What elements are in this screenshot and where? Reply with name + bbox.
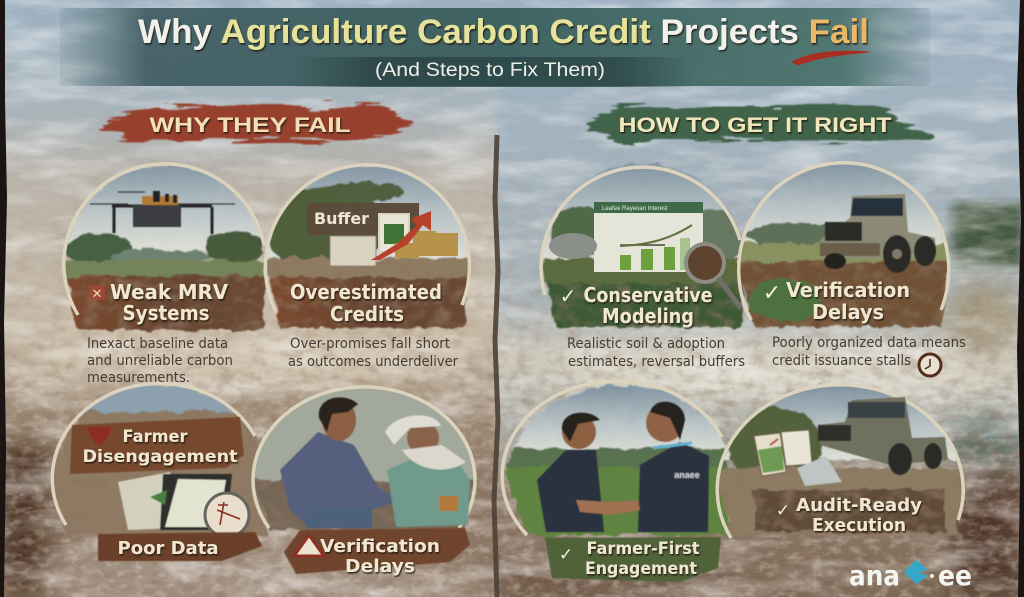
description: as outcomes underdeliver — [288, 354, 458, 370]
label: Weak MRV — [110, 280, 229, 304]
subtitle dark brush stroke — [290, 57, 695, 87]
check mark: ✓ — [763, 281, 781, 306]
icon: red shield — [87, 427, 112, 446]
heading: why they fail: WHY THEY FAIL — [150, 114, 351, 137]
two people shaking hands — [537, 402, 709, 532]
icon: warning triangle — [294, 535, 324, 556]
label: Farmer — [122, 427, 188, 447]
label: Execution — [812, 516, 906, 536]
check mark: ✓ — [776, 501, 790, 521]
check mark: ✓ — [560, 284, 576, 308]
panel: overestimated credits — [263, 160, 475, 370]
soil samples — [549, 233, 597, 259]
check mark: ✓ — [559, 545, 573, 565]
checklist documents — [754, 430, 842, 486]
icon: red up arrow — [371, 211, 431, 260]
truck — [818, 397, 948, 475]
icon: x mark: ✕ — [92, 287, 102, 302]
panel: audit-ready execution — [715, 385, 965, 538]
chart board: Leafee Rayeoan Interest — [602, 206, 668, 212]
panel: farmer disengagement / poor data — [50, 383, 270, 561]
description: measurements. — [87, 370, 190, 386]
brown label board — [98, 532, 262, 561]
label: Audit-Ready — [796, 496, 923, 516]
icon: coin stacks — [395, 231, 458, 258]
description: Poorly organized data means — [772, 335, 966, 351]
heading: how to get it right — [585, 106, 935, 141]
label: Engagement — [585, 559, 697, 578]
label: Delays — [345, 557, 415, 577]
description: credit issuance stalls — [772, 353, 911, 369]
green label board — [545, 537, 721, 582]
subtitle: (And Steps to Fix Them) — [375, 60, 605, 81]
label: Disengagement — [82, 447, 238, 467]
label: Farmer-First — [586, 539, 700, 558]
label: Poor Data — [118, 538, 218, 559]
description: estimates, reversal buffers — [568, 354, 745, 370]
icon: magnifying glass — [686, 244, 741, 308]
description: Inexact baseline data — [87, 336, 228, 352]
logo: anaxee: ana — [849, 559, 900, 592]
description: Realistic soil & adoption — [567, 336, 725, 352]
buffer word: Buffer — [314, 209, 369, 228]
brown label board — [70, 417, 244, 474]
logo dot — [930, 574, 934, 578]
panel: weak MRV systems — [60, 160, 270, 386]
red underline stroke — [792, 51, 869, 65]
truck — [820, 194, 936, 273]
panel: verification delays (right) — [738, 160, 966, 376]
logo: anaxee: ee — [938, 559, 972, 592]
panel: conservative modeling — [540, 160, 748, 370]
buffer sign — [307, 203, 419, 235]
chart board — [594, 202, 703, 272]
label: Modeling — [602, 304, 694, 328]
icon: clock — [205, 493, 249, 537]
label: Verification — [320, 537, 440, 557]
two people shaking hands: anaee — [674, 470, 700, 480]
label: Delays — [812, 300, 884, 324]
label: Conservative — [584, 283, 712, 307]
title banner — [60, 8, 930, 87]
icon: x mark — [89, 285, 105, 302]
document — [330, 236, 376, 266]
description: Over-promises fall short — [290, 336, 450, 352]
icon: drone — [90, 191, 235, 234]
label: Overestimated — [290, 280, 442, 304]
icon: money note — [379, 214, 409, 252]
panel: farmer-first engagement — [502, 381, 730, 582]
icon: logo diamond — [904, 560, 928, 584]
centre crack divider — [494, 135, 498, 597]
brown label board — [284, 528, 470, 574]
documents and tablet — [118, 472, 232, 530]
logo: anaxee — [849, 559, 972, 592]
title: Why Agriculture Carbon Credit Projects Fail — [138, 13, 869, 51]
heading: why they fail — [100, 106, 414, 141]
panel: verification delays (left) — [250, 385, 480, 577]
label: Systems — [122, 301, 210, 325]
label: Credits — [330, 302, 404, 326]
farmer and agronomist — [280, 397, 470, 528]
icon: clock — [919, 354, 941, 376]
heading: how to get it right: HOW TO GET IT RIGHT — [618, 114, 892, 137]
label: Verification — [786, 278, 910, 302]
description: and unreliable carbon — [87, 353, 233, 369]
